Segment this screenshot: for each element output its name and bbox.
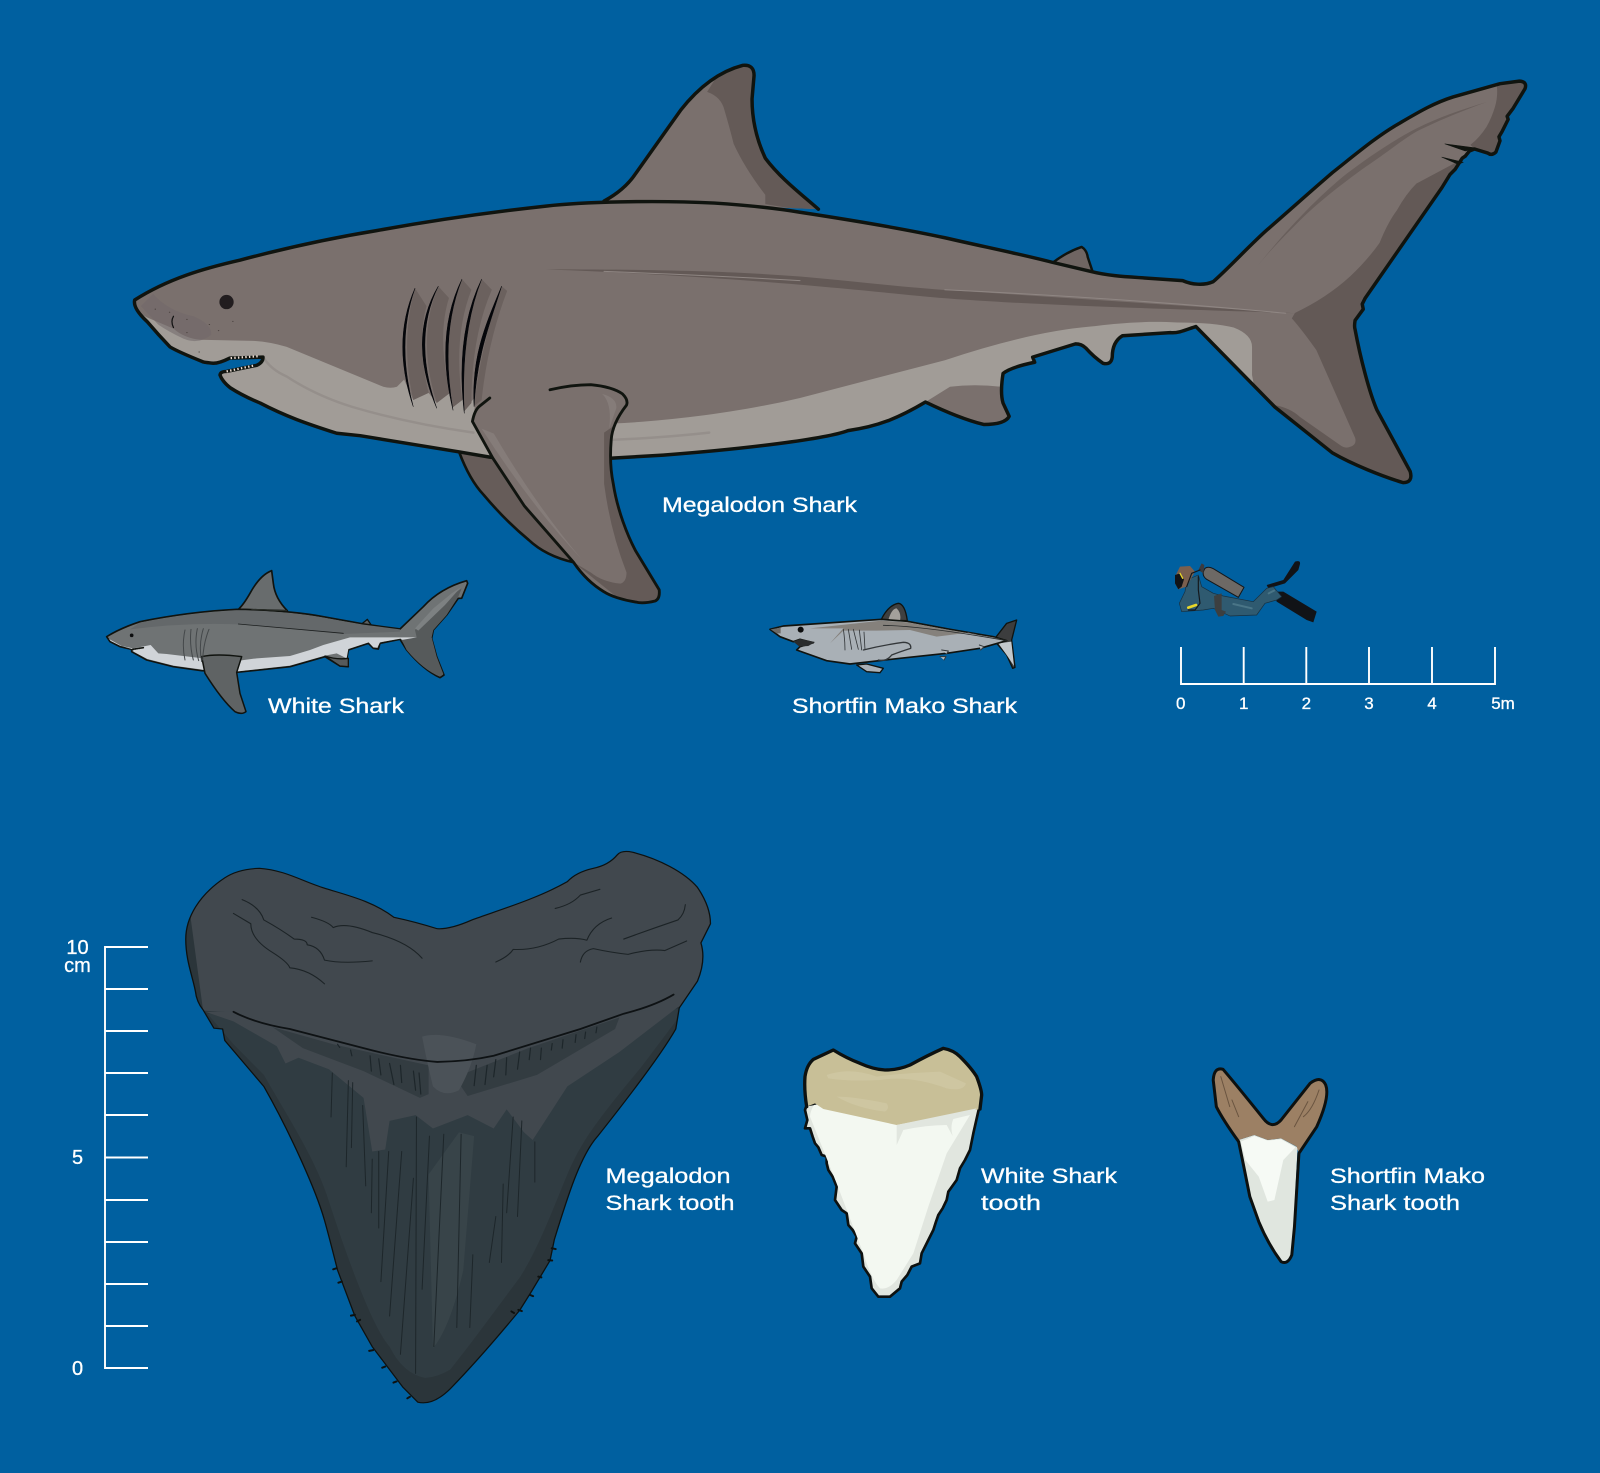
body outline bbox=[134, 81, 1526, 483]
snout shading bbox=[154, 320, 202, 341]
white tooth root outline bbox=[805, 1048, 982, 1109]
lateral line bbox=[546, 269, 1295, 313]
diver lower fin bbox=[1273, 592, 1317, 622]
second dorsal fin bbox=[1052, 247, 1093, 272]
centimetre labels: 10 bbox=[66, 937, 89, 959]
label: White Shark: White Shark bbox=[268, 694, 404, 718]
tooth root line bbox=[233, 995, 674, 1062]
nostril bbox=[172, 316, 173, 328]
white shark small dorsal fin bbox=[362, 619, 372, 627]
centimetre labels bbox=[64, 937, 91, 1380]
label: Shortfin Mako Shark tooth bbox=[1330, 1164, 1485, 1215]
mako tail bbox=[995, 620, 1017, 668]
pelvic fin bbox=[928, 385, 1008, 423]
mako back shading bbox=[810, 621, 1007, 643]
mako body bbox=[770, 619, 1007, 664]
illustration: white shark tooth bbox=[805, 1048, 982, 1297]
diver tank bbox=[1203, 567, 1244, 597]
scale labels: 5m bbox=[1491, 694, 1515, 713]
diver weight belt bbox=[1214, 593, 1226, 617]
tail lower lobe shading bbox=[1276, 163, 1456, 481]
tooth dark patches bbox=[272, 1018, 619, 1098]
illustration: shortfin mako shark bbox=[770, 603, 1017, 673]
label: Megalodon Shark tooth: Megalodon bbox=[606, 1164, 730, 1188]
tooth upper crown band bbox=[205, 1006, 679, 1151]
white tooth root bbox=[805, 1048, 982, 1125]
label: Megalodon Shark: Megalodon Shark bbox=[662, 493, 857, 517]
scale labels: 1 bbox=[1239, 694, 1248, 713]
illustration: shortfin mako tooth bbox=[1213, 1069, 1327, 1263]
label: Megalodon Shark tooth: Shark tooth bbox=[606, 1191, 734, 1215]
mako eye bbox=[798, 627, 804, 633]
pectoral fin bbox=[472, 385, 673, 612]
diver head bbox=[1175, 566, 1195, 589]
centimetre labels: 0 bbox=[72, 1358, 83, 1380]
icon: scuba diver bbox=[1175, 561, 1317, 622]
mako dorsal fin bbox=[881, 603, 907, 621]
white tooth enamel highlight bbox=[897, 1108, 977, 1145]
tooth centre streak bbox=[429, 1132, 474, 1348]
diver tank valve bbox=[1198, 563, 1204, 573]
white shark pectoral fin bbox=[202, 655, 246, 713]
tail streak bbox=[1264, 104, 1482, 258]
snout pores bbox=[155, 309, 233, 352]
gill slits bbox=[403, 279, 502, 413]
scale labels: 0 bbox=[1176, 694, 1185, 713]
white shark pelvic fin bbox=[325, 656, 348, 667]
scale labels bbox=[1176, 694, 1515, 713]
mako pelvic fin bbox=[857, 664, 883, 673]
tail notches bbox=[1442, 144, 1475, 164]
white shark teeth bbox=[133, 648, 143, 649]
tooth light smudge bbox=[422, 1035, 476, 1093]
tooth crown inner bbox=[207, 983, 684, 1378]
illustration: megalodon shark bbox=[122, 56, 1531, 612]
mako tooth root bbox=[1213, 1069, 1327, 1153]
white tooth enamel bbox=[805, 1090, 979, 1297]
diver body bbox=[1179, 575, 1282, 616]
label: White Shark tooth bbox=[981, 1164, 1117, 1215]
illustration: megalodon tooth bbox=[181, 849, 715, 1403]
tail tip shading bbox=[1470, 83, 1524, 152]
white shark eye bbox=[130, 633, 133, 637]
mako snout tip bbox=[771, 628, 781, 633]
scale bar: centimetres bbox=[64, 937, 148, 1380]
mako pectoral fin bbox=[863, 642, 911, 660]
tooth serrations bbox=[333, 1248, 556, 1398]
label: White Shark tooth: tooth bbox=[981, 1191, 1041, 1215]
tooth outline bbox=[186, 851, 710, 1403]
label: Shortfin Mako Shark tooth: Shortfin Mako bbox=[1330, 1164, 1485, 1188]
teeth bbox=[227, 356, 259, 371]
tooth root bbox=[181, 849, 715, 1062]
mako mouth bbox=[793, 639, 815, 647]
gill shadows bbox=[407, 279, 507, 411]
centimetre labels: 5 bbox=[72, 1147, 83, 1169]
mako tooth enamel bbox=[1239, 1135, 1298, 1263]
belly crease bbox=[263, 357, 709, 440]
centimetre ticks bbox=[105, 947, 148, 1368]
white shark gills bbox=[183, 629, 209, 662]
label: Shortfin Mako Shark tooth: Shark tooth bbox=[1330, 1191, 1460, 1215]
label: White Shark tooth: White Shark bbox=[981, 1164, 1117, 1188]
tooth enamel striations bbox=[331, 1073, 535, 1373]
scale bar: metres bbox=[1176, 647, 1515, 713]
centimetre labels: cm bbox=[64, 955, 91, 977]
scale labels: 3 bbox=[1364, 694, 1374, 713]
white shark tail lobes bbox=[402, 588, 462, 677]
eye bbox=[219, 295, 234, 309]
shark body bbox=[122, 77, 1531, 490]
diver upper fin bbox=[1267, 561, 1300, 588]
rear pectoral fin bbox=[459, 452, 573, 562]
scale labels: 4 bbox=[1427, 694, 1437, 713]
scale labels: 2 bbox=[1302, 694, 1311, 713]
mako tooth outline bbox=[1213, 1069, 1327, 1262]
white shark underside bbox=[109, 637, 417, 671]
white shark body bbox=[107, 581, 468, 678]
label: Shortfin Mako Shark: Shortfin Mako Shark bbox=[792, 694, 1017, 718]
mako gills bbox=[843, 629, 865, 650]
white shark dorsal fin bbox=[238, 571, 287, 611]
mako small fins bbox=[940, 645, 984, 660]
diver regulator bbox=[1188, 605, 1196, 608]
tooth root cracks bbox=[233, 889, 687, 984]
white shark upper back shading bbox=[130, 610, 400, 634]
label: Megalodon Shark tooth bbox=[606, 1164, 734, 1215]
diver straps bbox=[1187, 570, 1200, 610]
scale ticks bbox=[1181, 647, 1495, 684]
illustration: white shark bbox=[107, 571, 468, 713]
pale underside bbox=[143, 315, 1254, 456]
dorsal fin bbox=[604, 56, 827, 214]
